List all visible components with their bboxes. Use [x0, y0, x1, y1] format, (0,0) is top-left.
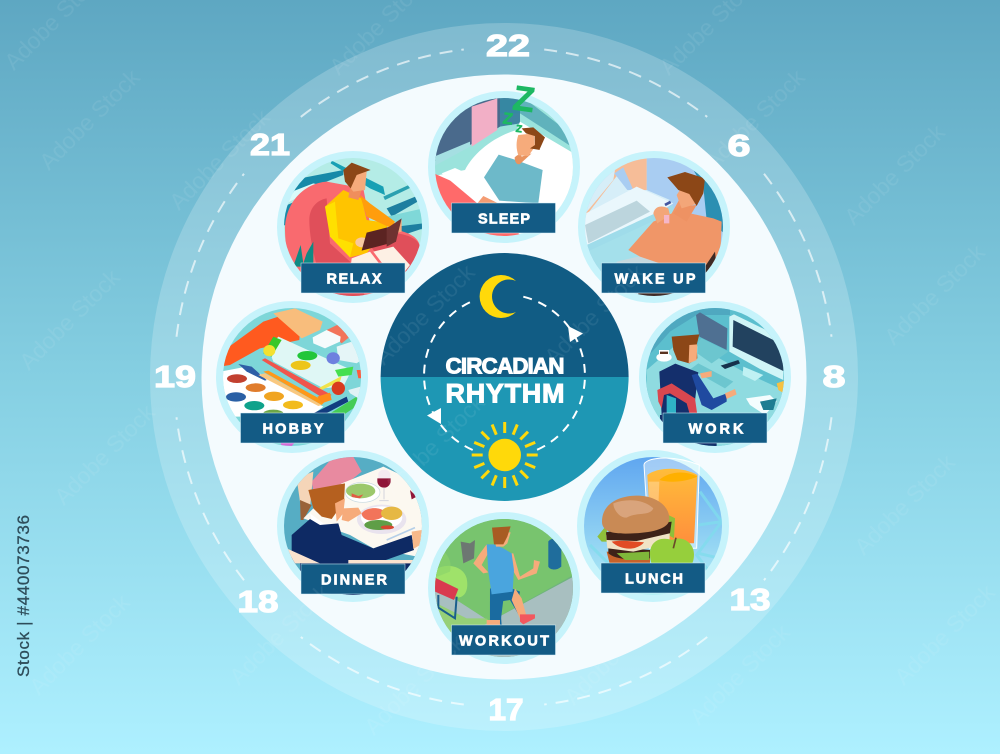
- label: dinner: DINNER: [321, 572, 388, 588]
- watermark pattern: Adobe Stock: [699, 64, 810, 175]
- icon: sleeping Z letters: Z: [510, 79, 537, 120]
- watermark pattern: Adobe Stock: [14, 264, 125, 375]
- label: lunch: [601, 563, 705, 593]
- label: relax: [301, 263, 405, 293]
- hour numbers: 22: [486, 28, 530, 63]
- watermark pattern: Adobe Stock: [34, 64, 145, 175]
- watermark: stock number: Stock | #440073736: [14, 515, 33, 677]
- burger: [597, 496, 675, 565]
- icon: sun: [472, 422, 538, 488]
- panel: work: [639, 301, 791, 453]
- panel: lunch: [577, 450, 729, 602]
- dashed hour track: [176, 50, 832, 704]
- illustration: man jogging: [435, 519, 573, 657]
- hour numbers: 13: [730, 582, 770, 617]
- label: relax: RELAX: [326, 272, 382, 288]
- label: work: WORK: [688, 422, 744, 438]
- label: hobby: HOBBY: [262, 422, 324, 438]
- panel: workout: [428, 512, 580, 665]
- illustration: man brushing teeth: [585, 158, 723, 296]
- illustration: man at computer: [643, 305, 790, 448]
- watermark pattern: Adobe Stock: [879, 239, 990, 350]
- icon: moon: [480, 275, 516, 318]
- hour numbers: 21: [250, 127, 290, 162]
- watermark pattern: Adobe Stock: [839, 119, 950, 230]
- label: wake up: WAKE UP: [614, 272, 696, 288]
- watermark pattern: Adobe Stock: [849, 449, 960, 560]
- title: CIRCADIAN: [446, 354, 564, 378]
- label: work: [663, 413, 767, 443]
- label: wake up: [602, 263, 706, 293]
- watermark pattern: Adobe Stock: [379, 389, 490, 500]
- watermark pattern: Adobe Stock: [359, 629, 470, 740]
- hour numbers: 8: [822, 359, 846, 394]
- watermark pattern: Adobe Stock: [24, 589, 135, 700]
- hour numbers: [154, 28, 846, 727]
- watermark pattern: Adobe Stock: [49, 399, 160, 510]
- white clock face: [202, 74, 806, 680]
- icon: sleeping Z letters: Z: [502, 110, 514, 129]
- illustration: man reading in armchair: [283, 157, 427, 300]
- hour numbers: 19: [154, 359, 196, 394]
- apple: [650, 538, 694, 567]
- illustration: man eating dinner: [280, 455, 427, 598]
- illustration: burger, juice and apple: [580, 455, 727, 598]
- panel: relax: [277, 151, 429, 303]
- title: RHYTHM: [446, 378, 564, 408]
- hour numbers: 18: [238, 584, 278, 619]
- hour numbers: 6: [728, 128, 750, 163]
- panel: dinner: [277, 450, 429, 602]
- center circle: circadian rhythm: [381, 253, 629, 501]
- arrowheads: [427, 326, 583, 424]
- watermark pattern: Adobe Stock: [684, 619, 795, 730]
- panel: wake up: [577, 150, 733, 303]
- hour numbers: 17: [488, 692, 524, 727]
- watermark pattern: Adobe Stock: [889, 579, 1000, 690]
- watermark pattern: Adobe Stock: [559, 599, 670, 710]
- label: hobby: [240, 413, 344, 443]
- label: sleep: SLEEP: [478, 212, 530, 228]
- watermark pattern: Adobe Stock: [164, 104, 275, 215]
- watermark pattern: Adobe Stock: [369, 259, 480, 370]
- watermark pattern: Adobe Stock: [539, 259, 650, 370]
- watermark pattern: Adobe Stock: [224, 579, 335, 690]
- icon: sleeping Z letters: Z: [515, 124, 523, 136]
- illustration: man sleeping: [435, 98, 573, 236]
- illustration: paints and brushes: [220, 307, 367, 450]
- label: workout: WORKOUT: [459, 634, 549, 650]
- dashed cycle arrows: [424, 297, 585, 450]
- panel: hobby: [216, 301, 368, 453]
- title: [446, 354, 564, 408]
- juice glass: [644, 458, 699, 548]
- label: lunch: LUNCH: [625, 572, 683, 588]
- panel: sleep: [428, 79, 580, 243]
- label: sleep: [452, 203, 556, 233]
- label: dinner: [301, 564, 405, 594]
- outer clock ring: [150, 23, 858, 731]
- label: workout: [452, 625, 556, 655]
- icon: sleeping Z letters: [502, 79, 537, 136]
